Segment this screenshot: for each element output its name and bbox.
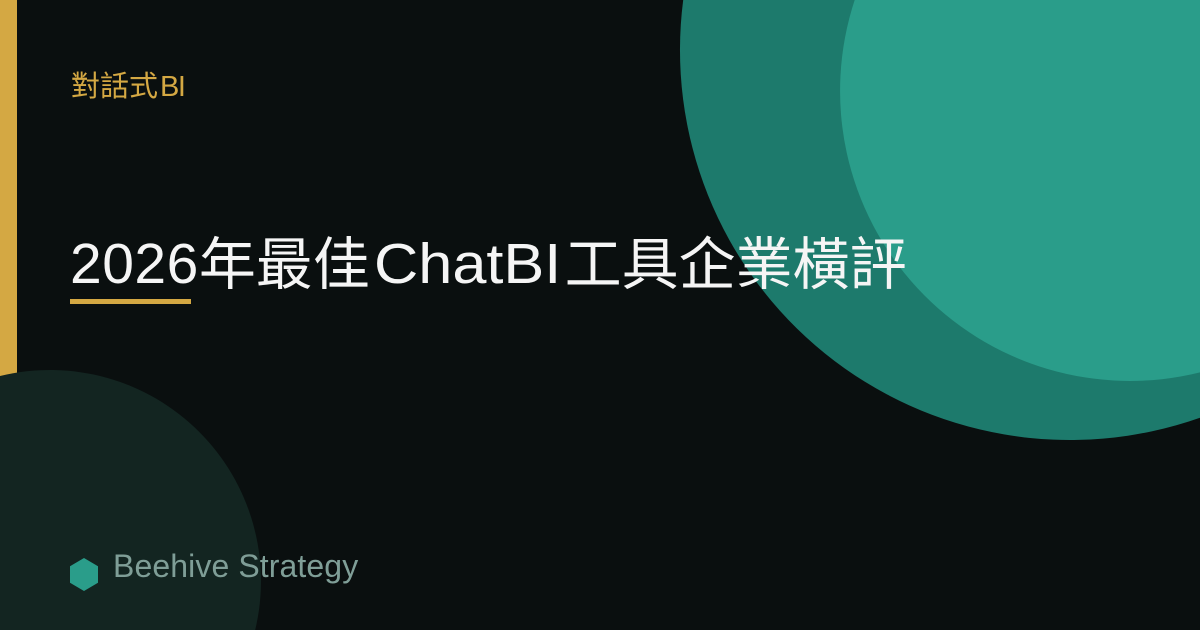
title: 2026年最佳 工具企業橫評	[70, 232, 907, 297]
brand name: Beehive Strategy	[113, 548, 358, 584]
category label: 對話式BI	[71, 71, 184, 103]
title: ChatBI	[374, 232, 561, 296]
accent bar: left edge	[0, 0, 17, 630]
title underline	[70, 299, 191, 304]
icon: hexagon logo	[70, 558, 98, 591]
